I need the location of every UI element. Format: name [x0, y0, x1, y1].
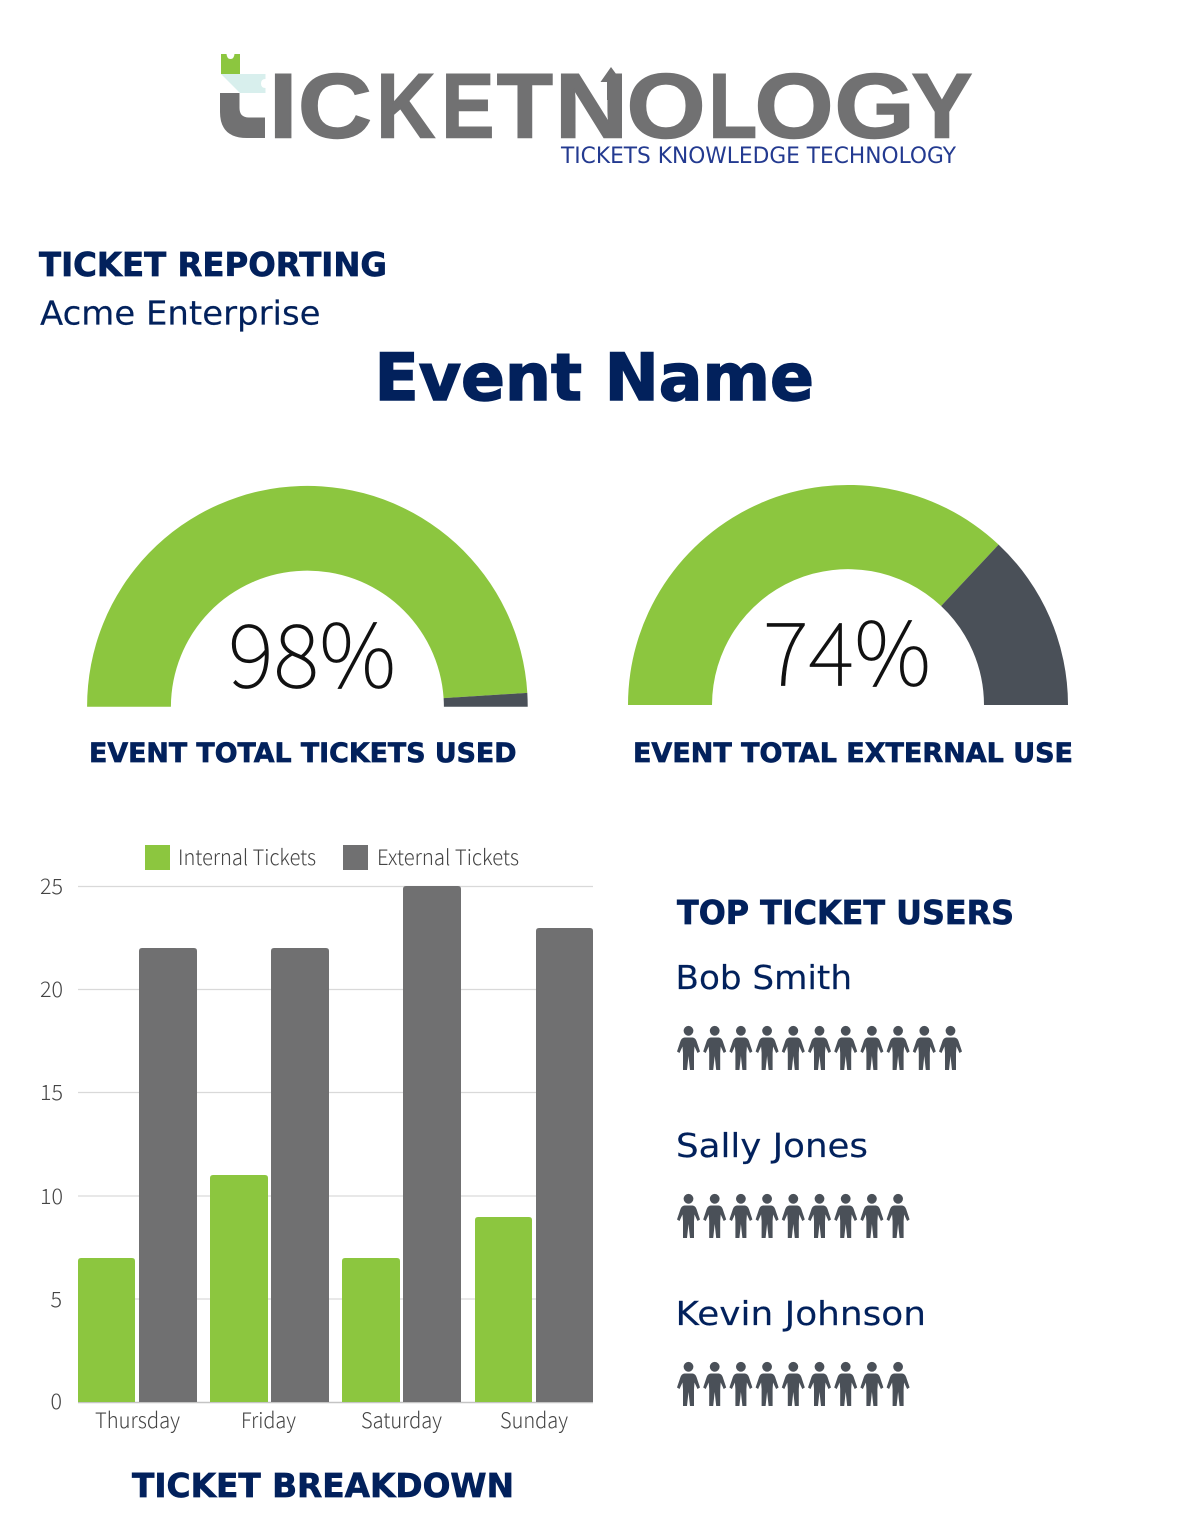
logo wordmark: I — [269, 56, 298, 158]
chart title: TICKET BREAKDOWN — [132, 1467, 514, 1505]
bar chart: ticket breakdown — [40, 841, 593, 1435]
y axis labels: 15 — [40, 1076, 63, 1107]
x axis labels: Friday — [241, 1404, 296, 1435]
logo wordmark: Y — [912, 56, 972, 158]
logo wordmark — [269, 56, 972, 158]
title: event name: Event Name — [374, 341, 814, 416]
chart legend: Internal Tickets — [178, 841, 316, 872]
logo tagline: TICKETS KNOWLEDGE TECHNOLOGY — [560, 144, 957, 169]
user: Sally Jones — [676, 1127, 910, 1238]
logo wordmark: O — [754, 56, 834, 158]
x axis labels: Saturday — [361, 1404, 442, 1435]
user: Kevin Johnson — [676, 1295, 926, 1406]
chart legend — [145, 841, 519, 872]
logo wordmark: K — [376, 56, 435, 158]
x axis labels: Sunday — [500, 1404, 568, 1435]
gauge value: 98% — [228, 586, 396, 714]
gauge label: external use: EVENT TOTAL EXTERNAL USE — [633, 738, 1073, 769]
logo wordmark: C — [298, 56, 372, 158]
bars — [78, 886, 593, 1402]
y axis labels — [40, 870, 63, 1416]
x axis labels — [95, 1404, 568, 1435]
y axis labels: 25 — [40, 870, 63, 901]
logo wordmark: N — [555, 56, 628, 158]
logo wordmark: O — [626, 56, 706, 158]
y axis labels: 20 — [40, 973, 63, 1004]
user: Bob Smith — [676, 959, 962, 1070]
gauge label: tickets used: EVENT TOTAL TICKETS USED — [89, 738, 516, 769]
subheading: company name: Acme Enterprise — [40, 294, 320, 332]
icon: arrow on N — [600, 67, 622, 100]
heading: ticket reporting: TICKET REPORTING — [39, 246, 387, 284]
gauge value: 74% — [763, 584, 931, 712]
pictogram: 9 people — [677, 1194, 910, 1238]
gauge: tickets used — [87, 486, 528, 714]
user: Bob Smith: Bob Smith — [676, 959, 852, 997]
y axis labels: 5 — [50, 1283, 62, 1314]
x axis labels: Thursday — [95, 1404, 180, 1435]
logo — [220, 54, 972, 169]
y axis labels: 0 — [50, 1385, 62, 1416]
logo wordmark: E — [441, 56, 494, 158]
user: Sally Jones: Sally Jones — [676, 1127, 868, 1165]
gauge: external use — [628, 485, 1068, 712]
chart legend: External Tickets — [377, 841, 519, 872]
pictogram: 9 people — [677, 1362, 910, 1406]
pictogram: 11 people — [677, 1026, 962, 1070]
logo wordmark: T — [497, 56, 553, 158]
logo wordmark: G — [834, 56, 915, 158]
icon: ticket letter T — [220, 54, 266, 138]
logo wordmark: L — [708, 56, 757, 158]
user: Kevin Johnson: Kevin Johnson — [676, 1295, 926, 1333]
heading: top ticket users: TOP TICKET USERS — [677, 894, 1014, 932]
y axis labels: 10 — [40, 1180, 63, 1211]
